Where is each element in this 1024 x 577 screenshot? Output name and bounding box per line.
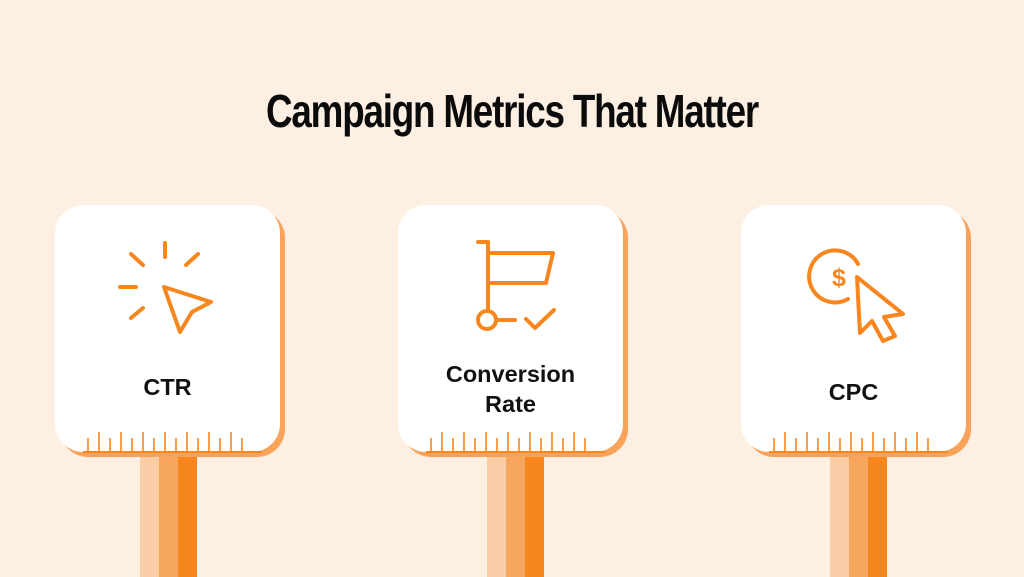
icon: click cursor (120, 243, 211, 332)
panel: CTR (55, 205, 285, 577)
panel: CPC (741, 205, 971, 577)
label: CTR: CTR (143, 374, 192, 400)
label: Conversion Rate: Conversion (446, 361, 575, 387)
icon: cart with check (478, 242, 554, 329)
label: CPC: CPC (829, 379, 878, 405)
label: Conversion Rate: Rate (485, 391, 536, 417)
icon: dollar coin cursor (809, 250, 903, 341)
label: Conversion Rate (446, 361, 575, 417)
panel: Conversion Rate (398, 205, 628, 577)
title: Campaign Metrics That Matter (266, 85, 758, 137)
panel: CPC: $ (832, 264, 846, 292)
